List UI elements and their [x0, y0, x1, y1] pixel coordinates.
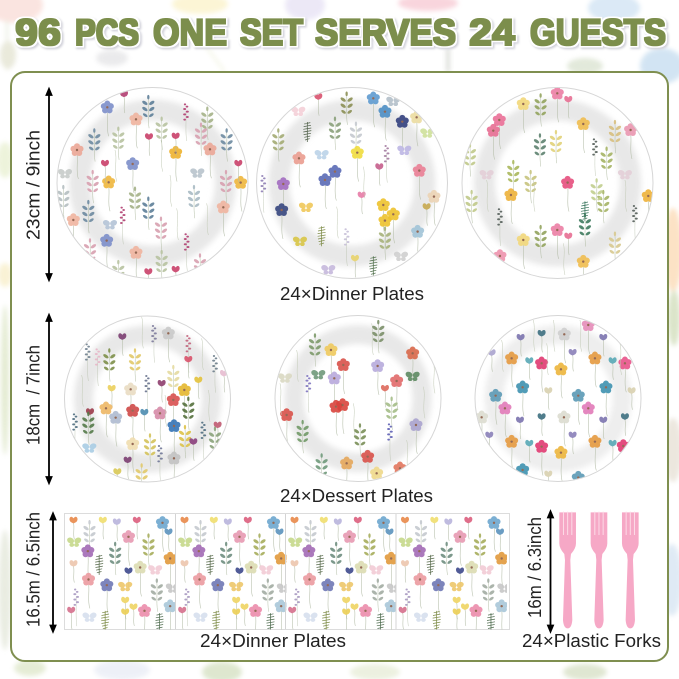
- dessert plate 3: [474, 315, 642, 482]
- napkins: [64, 514, 512, 640]
- title: ONE: [153, 12, 227, 53]
- title: [15, 12, 666, 53]
- title: 24: [469, 12, 515, 53]
- label: dessert plates: 24×Dessert Plates: [280, 486, 433, 506]
- arrow: napkin height: [50, 514, 56, 632]
- title: SERVES: [315, 12, 456, 53]
- dimension: dinner plate: 23cm / 9inch: [24, 130, 44, 240]
- arrow: fork length: [548, 512, 553, 632]
- title: GUESTS: [530, 12, 666, 53]
- title: PCS: [75, 12, 139, 53]
- arrow: dessert plate height: [46, 315, 52, 483]
- dessert plate 1: [64, 316, 230, 497]
- dinner plate 3: [462, 87, 655, 291]
- label: plastic forks: 24×Plastic Forks: [522, 631, 661, 651]
- dimension: fork: 16m / 6.3inch: [525, 517, 545, 618]
- dimension: napkin: 16.5m / 6.5inch: [24, 512, 44, 627]
- dinner plate 1: [56, 88, 248, 293]
- arrow: dinner plate height: [46, 89, 52, 280]
- plastic forks: [559, 512, 639, 628]
- label: napkins: 24×Dinner Plates: [200, 631, 346, 651]
- dinner plate 2: [256, 88, 448, 278]
- title: 96: [15, 12, 61, 53]
- title: SET: [240, 12, 303, 53]
- label: dinner plates: 24×Dinner Plates: [280, 284, 424, 304]
- dimension: dessert plate: 18cm / 7inch: [24, 345, 44, 445]
- dessert plate 2: [274, 315, 442, 482]
